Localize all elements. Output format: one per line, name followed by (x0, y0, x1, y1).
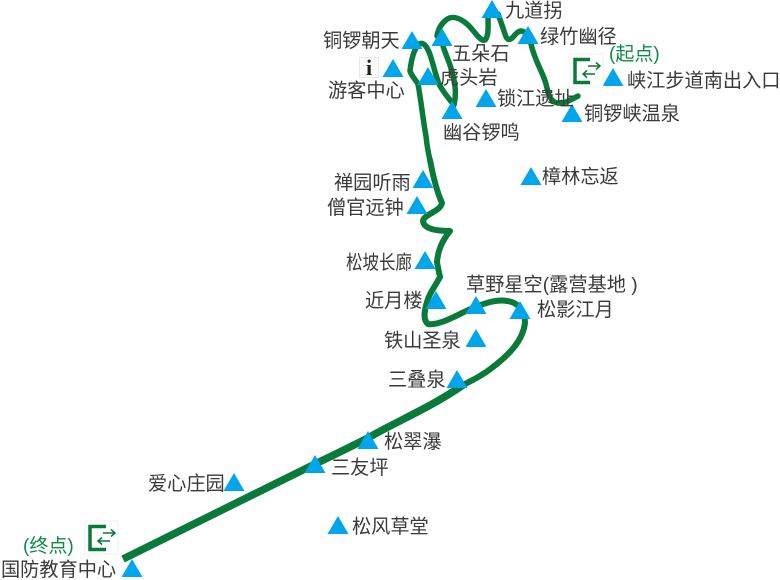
place labels: 爱心庄园 (148, 473, 225, 495)
route: upper trail (410, 14, 578, 160)
place labels: 松翠瀑 (384, 431, 442, 453)
place labels: 松影江月 (537, 299, 614, 321)
icon: visitor information (360, 55, 378, 80)
place labels: 僧官远钟 (327, 197, 404, 219)
place labels: 铁山圣泉 (384, 330, 461, 352)
end label: (终点) (23, 535, 74, 557)
place labels: 虎头岩 (440, 67, 498, 89)
route: lower trail (123, 385, 463, 559)
place labels: 峡江步道南出入口 (627, 70, 780, 92)
place labels: 三叠泉 (388, 369, 446, 391)
place labels: 九道拐 (505, 0, 563, 22)
place labels: 松风草堂 (352, 516, 429, 538)
place labels: 三友坪 (331, 457, 389, 479)
place labels: 游客中心 (328, 80, 405, 102)
icon: visitor information: i (366, 55, 372, 80)
route: middle trail (423, 160, 525, 385)
place labels: 松坡长廊 (346, 252, 412, 274)
place labels: 幽谷锣鸣 (443, 122, 520, 144)
place labels: 近月楼 (365, 290, 423, 312)
place labels: 樟林忘返 (542, 166, 619, 188)
place labels: 锁江遗址 (497, 88, 574, 110)
place labels: 草野星空(露营基地 ) (466, 274, 638, 296)
place labels: 绿竹幽径 (540, 26, 617, 48)
icon: end exit (85, 521, 118, 554)
icon: start exit (570, 54, 603, 87)
place labels: 铜锣峡温泉 (584, 103, 680, 125)
place labels: 铜锣朝天 (323, 30, 400, 52)
place labels: 五朵石 (452, 44, 510, 65)
place labels: 禅园听雨 (334, 172, 411, 194)
marker triangles (122, 0, 624, 577)
start label: (起点) (609, 43, 660, 65)
